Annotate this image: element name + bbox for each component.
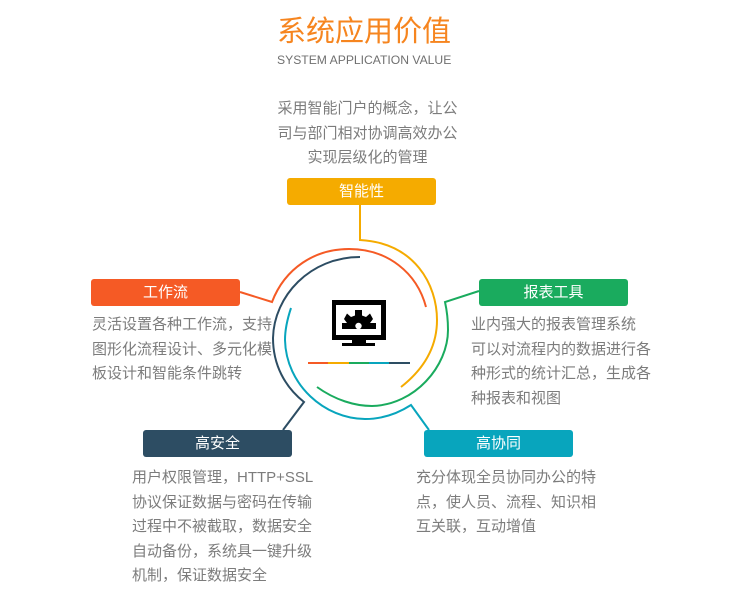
text block: security: 机制，保证数据安全 — [132, 567, 267, 584]
label: collaboration — [424, 430, 573, 457]
title: 系统应用价值 — [277, 16, 451, 48]
subtitle: SYSTEM APPLICATION VALUE — [277, 53, 451, 67]
text block: collaboration: 充分体现全员协同办公的特 — [416, 469, 596, 486]
text block: intelligence: 司与部门相对协调高效办公 — [277, 124, 458, 142]
text block: collaboration: 点，使人员、流程、知识相 — [416, 494, 596, 510]
text block: intelligence: 实现层级化的管理 — [307, 149, 428, 166]
label: workflow — [91, 279, 240, 306]
arc: navy — [273, 257, 360, 430]
text block: collaboration: 互关联，互动增值 — [416, 518, 536, 535]
text block: intelligence — [277, 100, 458, 166]
text block: reports: 可以对流程内的数据进行各 — [471, 340, 651, 358]
text block: reports: 种形式的统计汇总，生成各 — [471, 365, 651, 382]
text block: workflow: 灵活设置各种工作流，支持 — [92, 316, 272, 333]
text block: security — [132, 469, 313, 584]
label: intelligence: 智能性 — [339, 183, 384, 200]
label: security: 高安全 — [195, 435, 240, 452]
text block: workflow: 图形化流程设计、多元化模 — [92, 340, 272, 358]
text block: security: 用户权限管理，HTTP+SSL — [132, 469, 313, 486]
text block: workflow: 板设计和智能条件跳转 — [92, 365, 242, 382]
text block: intelligence: 采用智能门户的概念，让公 — [277, 100, 458, 117]
arc: red — [240, 249, 426, 307]
icon: monitor with gear — [332, 300, 386, 346]
text block: security: 协议保证数据与密码在传输 — [132, 494, 312, 510]
arc: green — [317, 291, 479, 406]
text block: collaboration — [416, 469, 596, 535]
text block: security: 自动备份，系统具一键升级 — [132, 542, 312, 560]
label: reports — [479, 279, 628, 306]
label: collaboration: 高协同 — [476, 435, 521, 452]
text block: security: 过程中不被截取，数据安全 — [132, 518, 312, 535]
label: workflow: 工作流 — [143, 284, 188, 301]
label: intelligence — [287, 178, 436, 205]
arc: yellow — [360, 205, 437, 387]
label: security — [143, 430, 292, 457]
label: reports: 报表工具 — [523, 284, 584, 301]
arc: teal — [285, 308, 429, 430]
text block: workflow — [92, 316, 272, 382]
text block: reports — [471, 316, 651, 406]
colour divider — [308, 362, 410, 364]
text block: reports: 业内强大的报表管理系统 — [471, 316, 636, 333]
text block: reports: 种报表和视图 — [471, 390, 561, 406]
